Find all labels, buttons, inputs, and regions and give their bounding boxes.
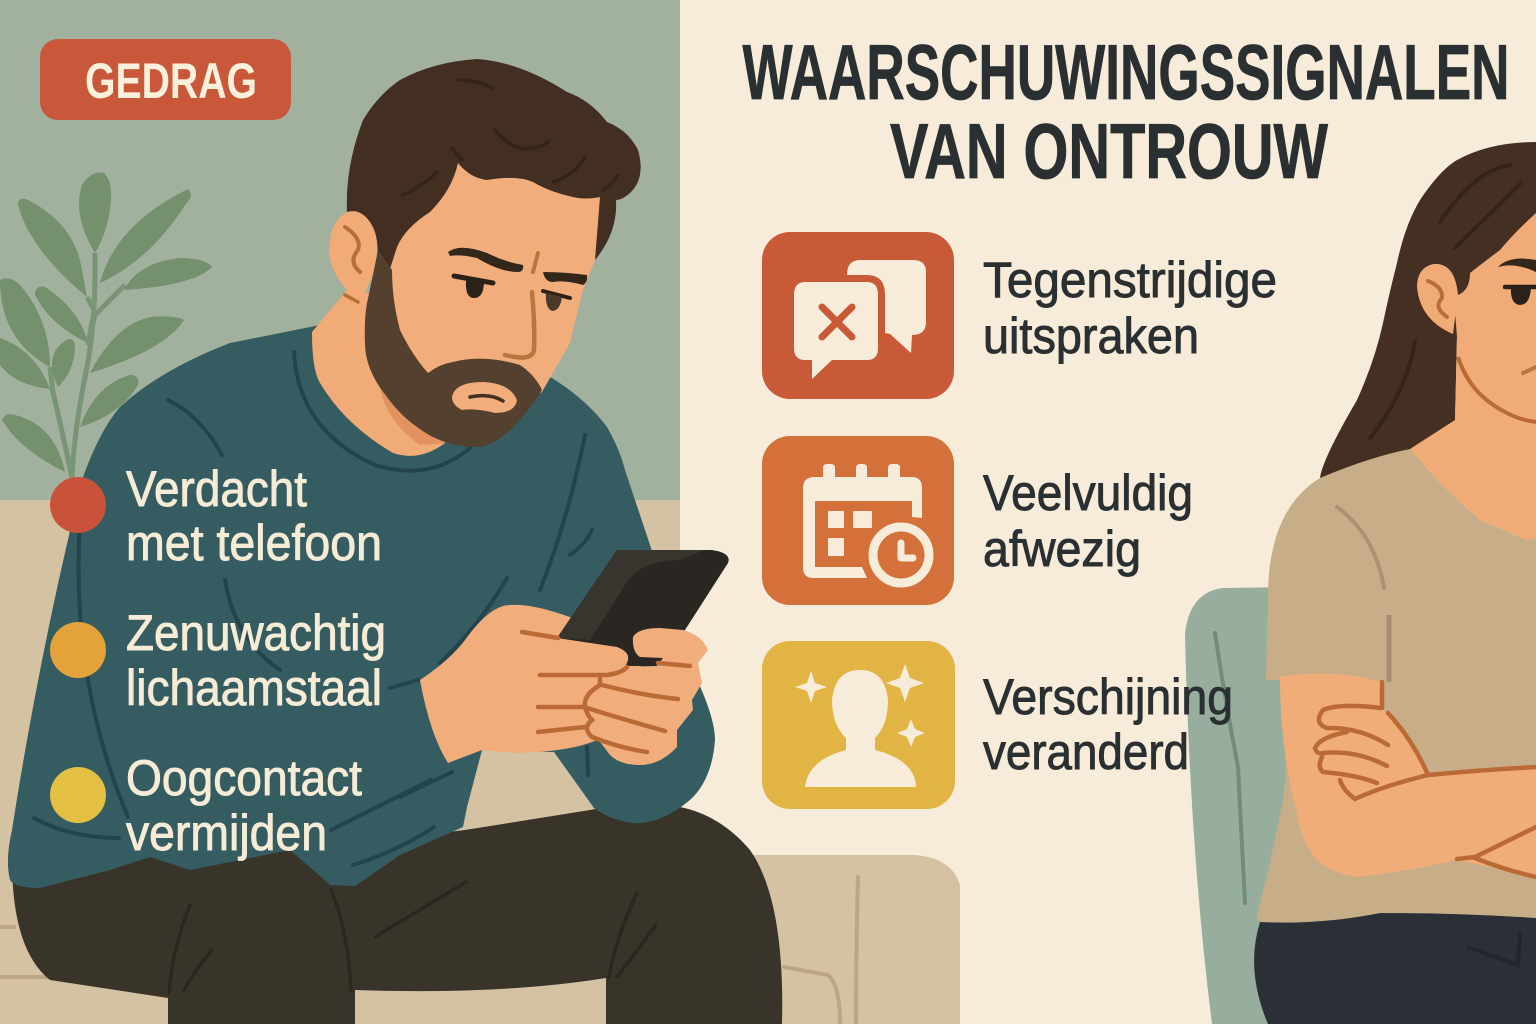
icon: plant: [0, 172, 212, 478]
text: verschijning veranderd: veranderd: [983, 724, 1189, 780]
text: zenuwachtig lichaamstaal: [126, 605, 386, 716]
title: VAN ONTROUW: [890, 107, 1328, 195]
illustration: man: [8, 59, 782, 1024]
man: beard: [365, 250, 542, 447]
man: ear: [329, 209, 377, 302]
text: tegenstrijdige uitspraken: Tegenstrijdige: [983, 252, 1277, 308]
icon: contradictory speech bubbles: [762, 232, 954, 399]
bullet: yellow: [50, 767, 106, 823]
text: oogcontact vermijden: vermijden: [126, 805, 327, 861]
man: phone and hands: [420, 550, 729, 765]
text: verdacht met telefoon: Verdacht: [126, 461, 307, 517]
left background panel: [0, 0, 960, 1024]
badge: GEDRAG: [40, 39, 291, 120]
bullet: red: [50, 477, 106, 533]
man: face: [385, 163, 600, 430]
text: verdacht met telefoon: met telefoon: [126, 515, 382, 571]
text: verschijning veranderd: Verschijning: [983, 669, 1233, 725]
text: tegenstrijdige uitspraken: [983, 252, 1277, 364]
badge: GEDRAG: GEDRAG: [85, 53, 257, 109]
text: veelvuldig afwezig: afwezig: [983, 521, 1141, 577]
woman: hair: [1320, 142, 1536, 478]
icon: person with sparkles: [762, 641, 955, 809]
text: oogcontact vermijden: [126, 750, 362, 861]
woman: trousers: [1254, 913, 1536, 1024]
man: neck: [312, 290, 445, 456]
text: zenuwachtig lichaamstaal: lichaamstaal: [126, 660, 382, 716]
text: oogcontact vermijden: Oogcontact: [126, 750, 362, 806]
woman: shirt: [1257, 449, 1536, 923]
list: behaviours on sweater: [50, 461, 386, 861]
icon: calendar with clock: [762, 436, 954, 605]
text: verschijning veranderd: [983, 669, 1233, 780]
text: veelvuldig afwezig: [983, 465, 1193, 577]
bullet: orange: [50, 622, 106, 678]
man: hair: [347, 59, 641, 275]
text: tegenstrijdige uitspraken: uitspraken: [983, 308, 1199, 364]
text: zenuwachtig lichaamstaal: Zenuwachtig: [126, 605, 386, 661]
woman: face and neck: [1410, 213, 1536, 540]
man: sweater: [8, 325, 715, 888]
man: eyes and brows: [448, 248, 587, 358]
text: verdacht met telefoon: [126, 461, 382, 571]
woman: chair: [1185, 587, 1300, 1024]
title: [742, 28, 1510, 195]
illustration: woman: [1185, 142, 1536, 1024]
woman: arms: [1280, 673, 1536, 877]
man: trousers: [12, 806, 782, 1024]
text: veelvuldig afwezig: Veelvuldig: [983, 465, 1193, 521]
